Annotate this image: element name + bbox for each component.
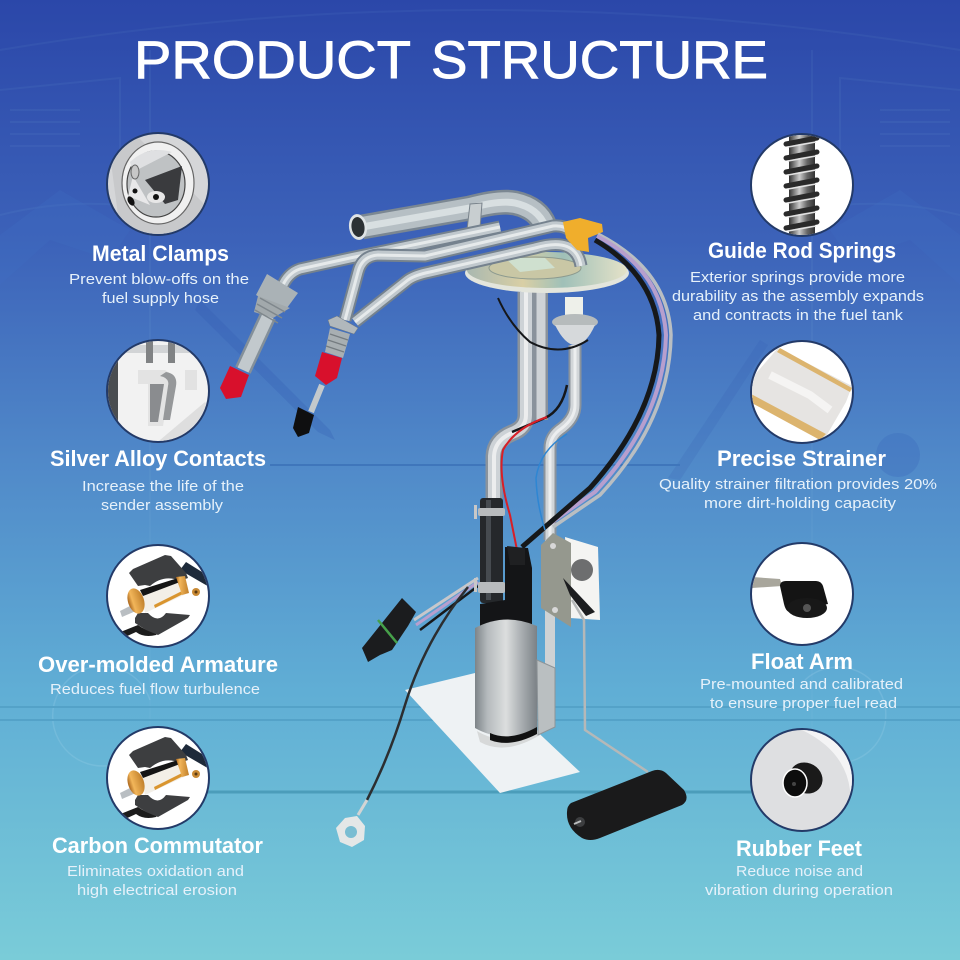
vertical stems — [494, 292, 575, 680]
icon: spring — [751, 132, 853, 238]
fuel pressure regulator — [552, 297, 598, 345]
wiring harness — [414, 234, 671, 630]
description: Quality strainer filtration provides 20% — [659, 476, 937, 493]
title: PRODUCT — [134, 31, 411, 90]
heading: Guide Rod Springs — [708, 238, 896, 263]
description: Exterior springs provide more — [690, 269, 905, 286]
title: STRUCTURE — [431, 31, 768, 90]
panel: carbon commutator — [52, 727, 263, 899]
large inlet tube — [347, 202, 545, 241]
strainer sock — [405, 673, 580, 793]
heading: Over-molded Armature — [38, 652, 278, 677]
description: to ensure proper fuel read — [710, 695, 897, 712]
left fuel line with fitting — [243, 227, 500, 370]
description — [705, 863, 893, 899]
heading: Rubber Feet — [736, 836, 863, 861]
sending unit — [541, 533, 600, 627]
float rod — [572, 600, 648, 772]
description — [700, 676, 903, 712]
heading: Precise Strainer — [717, 446, 886, 471]
red and black caps — [220, 352, 342, 437]
icon: strainer — [750, 341, 853, 443]
icon: rubber foot — [750, 728, 854, 832]
heading: Carbon Commutator — [52, 833, 263, 858]
panel: silver alloy contacts — [50, 340, 266, 514]
heading: Metal Clamps — [92, 241, 229, 266]
description: vibration during operation — [705, 882, 893, 899]
heading: Silver Alloy Contacts — [50, 446, 266, 471]
description: Prevent blow-offs on the — [69, 271, 249, 288]
description: sender assembly — [101, 497, 224, 514]
description — [69, 271, 249, 307]
icon: armature — [107, 545, 218, 647]
product: fuel pump sender assembly — [220, 202, 687, 847]
description — [659, 476, 937, 512]
description: and contracts in the fuel tank — [693, 307, 904, 324]
ground wire and ring terminal — [336, 587, 468, 847]
right fuel lines with fitting — [311, 226, 581, 412]
description: Pre-mounted and calibrated — [700, 676, 903, 693]
float — [567, 770, 687, 840]
description: high electrical erosion — [77, 882, 237, 899]
description — [82, 478, 244, 514]
panel: guide rod springs — [672, 132, 924, 324]
pump module — [475, 546, 555, 748]
description: more dirt-holding capacity — [704, 495, 897, 512]
panel: over-molded armature — [38, 545, 278, 698]
icon: float — [751, 543, 853, 645]
black hose and clamps — [474, 498, 505, 603]
heading: Float Arm — [751, 649, 853, 674]
panel: metal clamps — [69, 133, 249, 307]
description: Increase the life of the — [82, 478, 244, 495]
yellow connector — [563, 218, 603, 252]
panel: precise strainer — [659, 341, 937, 512]
panel: float arm — [700, 543, 903, 712]
description: Reduces fuel flow turbulence — [50, 681, 260, 698]
description: Reduce noise and — [736, 863, 863, 880]
panel: rubber feet — [705, 728, 892, 898]
description — [67, 863, 244, 899]
electrical connector — [362, 598, 416, 662]
icon: metal clamp — [107, 133, 210, 240]
title — [134, 31, 768, 90]
description: Eliminates oxidation and — [67, 863, 244, 880]
description: durability as the assembly expands — [672, 288, 924, 305]
flange — [465, 252, 629, 293]
icon: commutator — [107, 727, 218, 829]
description: fuel supply hose — [102, 290, 219, 307]
icon: contacts — [107, 340, 212, 445]
description — [672, 269, 924, 324]
